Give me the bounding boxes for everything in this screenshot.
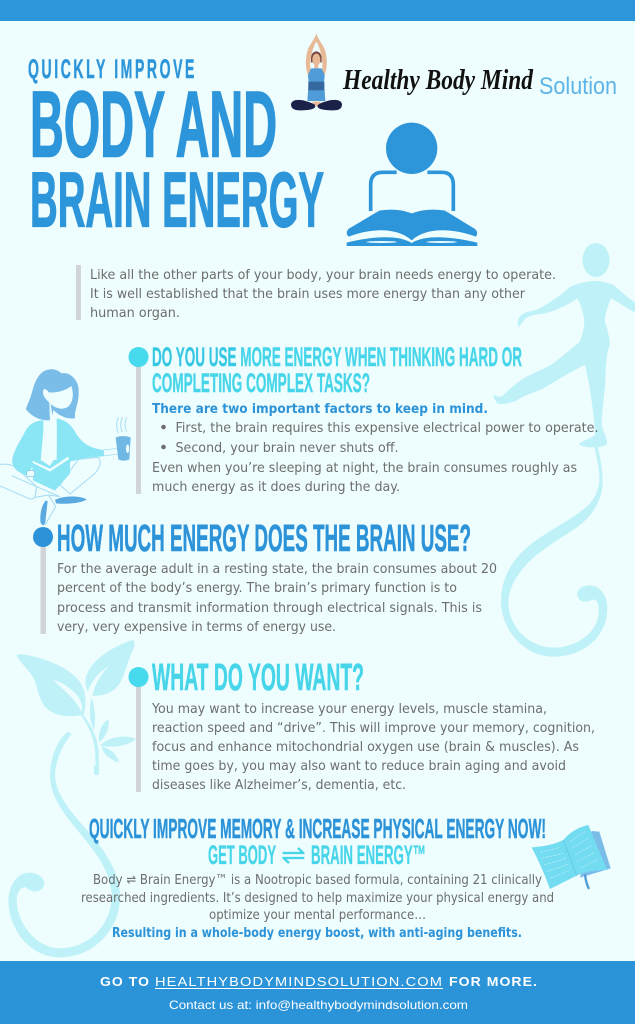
panel: intro [76, 265, 556, 321]
panel: call to action: optimize your mental performance… [209, 907, 426, 923]
panel: what do you want: time goes by, you may also want to reduce brain aging and avoid [152, 758, 566, 774]
panel: do you use more energy: First, the brain requires this expensive electrical power to operate. [176, 420, 598, 436]
product name: GET BODY [208, 840, 276, 870]
top bar [0, 0, 635, 21]
heading: quickly improve: QUICKLY IMPROVE [28, 54, 197, 84]
illustration: woman reading with coffee [0, 369, 131, 526]
panel: do you use more energy: COMPLETING COMPLEX TASKS? [152, 368, 370, 398]
panel: how much energy: percent of the body’s energy. The brain’s primary function is to [57, 580, 457, 596]
panel: call to action: researched ingredients. It’s designed to help maximize your physical energy and [81, 890, 554, 906]
product name [208, 840, 426, 871]
brand name: Solution: Solution [539, 73, 617, 100]
text: BRAIN ENERGY [30, 156, 324, 244]
panel: how much energy: For the average adult in a resting state, the brain consumes about 20 [57, 561, 497, 577]
product name: ⇌ [281, 840, 306, 871]
panel: do you use more energy: There are two important factors to keep in mind. [152, 401, 488, 417]
panel: do you use more energy: Even when you’re sleeping at night, the brain consumes roughly as [152, 460, 577, 476]
panel: what do you want: reaction speed and “drive”. This will improve your memory, cognition, [152, 720, 595, 736]
icon: meditating woman [291, 33, 342, 110]
panel: what do you want: diseases like Alzheimer’s, dementia, etc. [152, 777, 406, 793]
panel: intro: It is well established that the brain uses more energy than any other [90, 286, 525, 302]
panel: what do you want [128, 657, 595, 793]
brand name: Healthy Body Mind: Healthy Body Mind [342, 64, 533, 96]
icon: open notebook [532, 825, 611, 889]
footer: GO TO [100, 974, 150, 989]
decoration: dancer figure with swirl [494, 243, 635, 657]
panel: intro: Like all the other parts of your body, your brain needs energy to operate. [90, 267, 556, 283]
logo: yoga figure and brand name [291, 33, 617, 110]
panel: intro: human organ. [90, 305, 180, 321]
panel: do you use more energy: Second, your brain never shuts off. [176, 440, 398, 456]
footer: HEALTHYBODYMINDSOLUTION.COM [155, 974, 443, 989]
panel: call to action: Body ⇌ Brain Energy™ is a Nootropic based formula, containing 21 clinically [93, 872, 542, 888]
icon: person reading book [347, 123, 477, 246]
panel: do you use more energy: much energy as it does during the day. [152, 479, 400, 495]
panel: do you use more energy [128, 342, 598, 495]
panel: how much energy: process and transmit information through electrical signals. This is [57, 600, 482, 616]
panel: call to action: BRAIN ENERGY™ [311, 840, 426, 870]
panel: what do you want: You may want to increase your energy levels, muscle stamina, [151, 701, 547, 717]
decoration: leaves and swirl [8, 640, 136, 957]
panel: how much energy: very, very expensive in terms of energy use. [57, 619, 336, 635]
panel: what do you want: WHAT DO YOU WANT? [152, 657, 364, 699]
footer: FOR MORE. [449, 974, 538, 989]
panel: how much energy [33, 518, 497, 635]
panel: call to action: Resulting in a whole-body energy boost, with anti-aging benefits. [112, 925, 522, 941]
text: BODY AND [30, 72, 277, 176]
footer [0, 961, 635, 1024]
panel: what do you want: focus and enhance mitochondrial oxygen use (brain & muscles). As [152, 739, 579, 755]
footer: Contact us at: info@healthybodymindsolution.com [169, 998, 468, 1012]
panel: call to action [81, 813, 554, 941]
